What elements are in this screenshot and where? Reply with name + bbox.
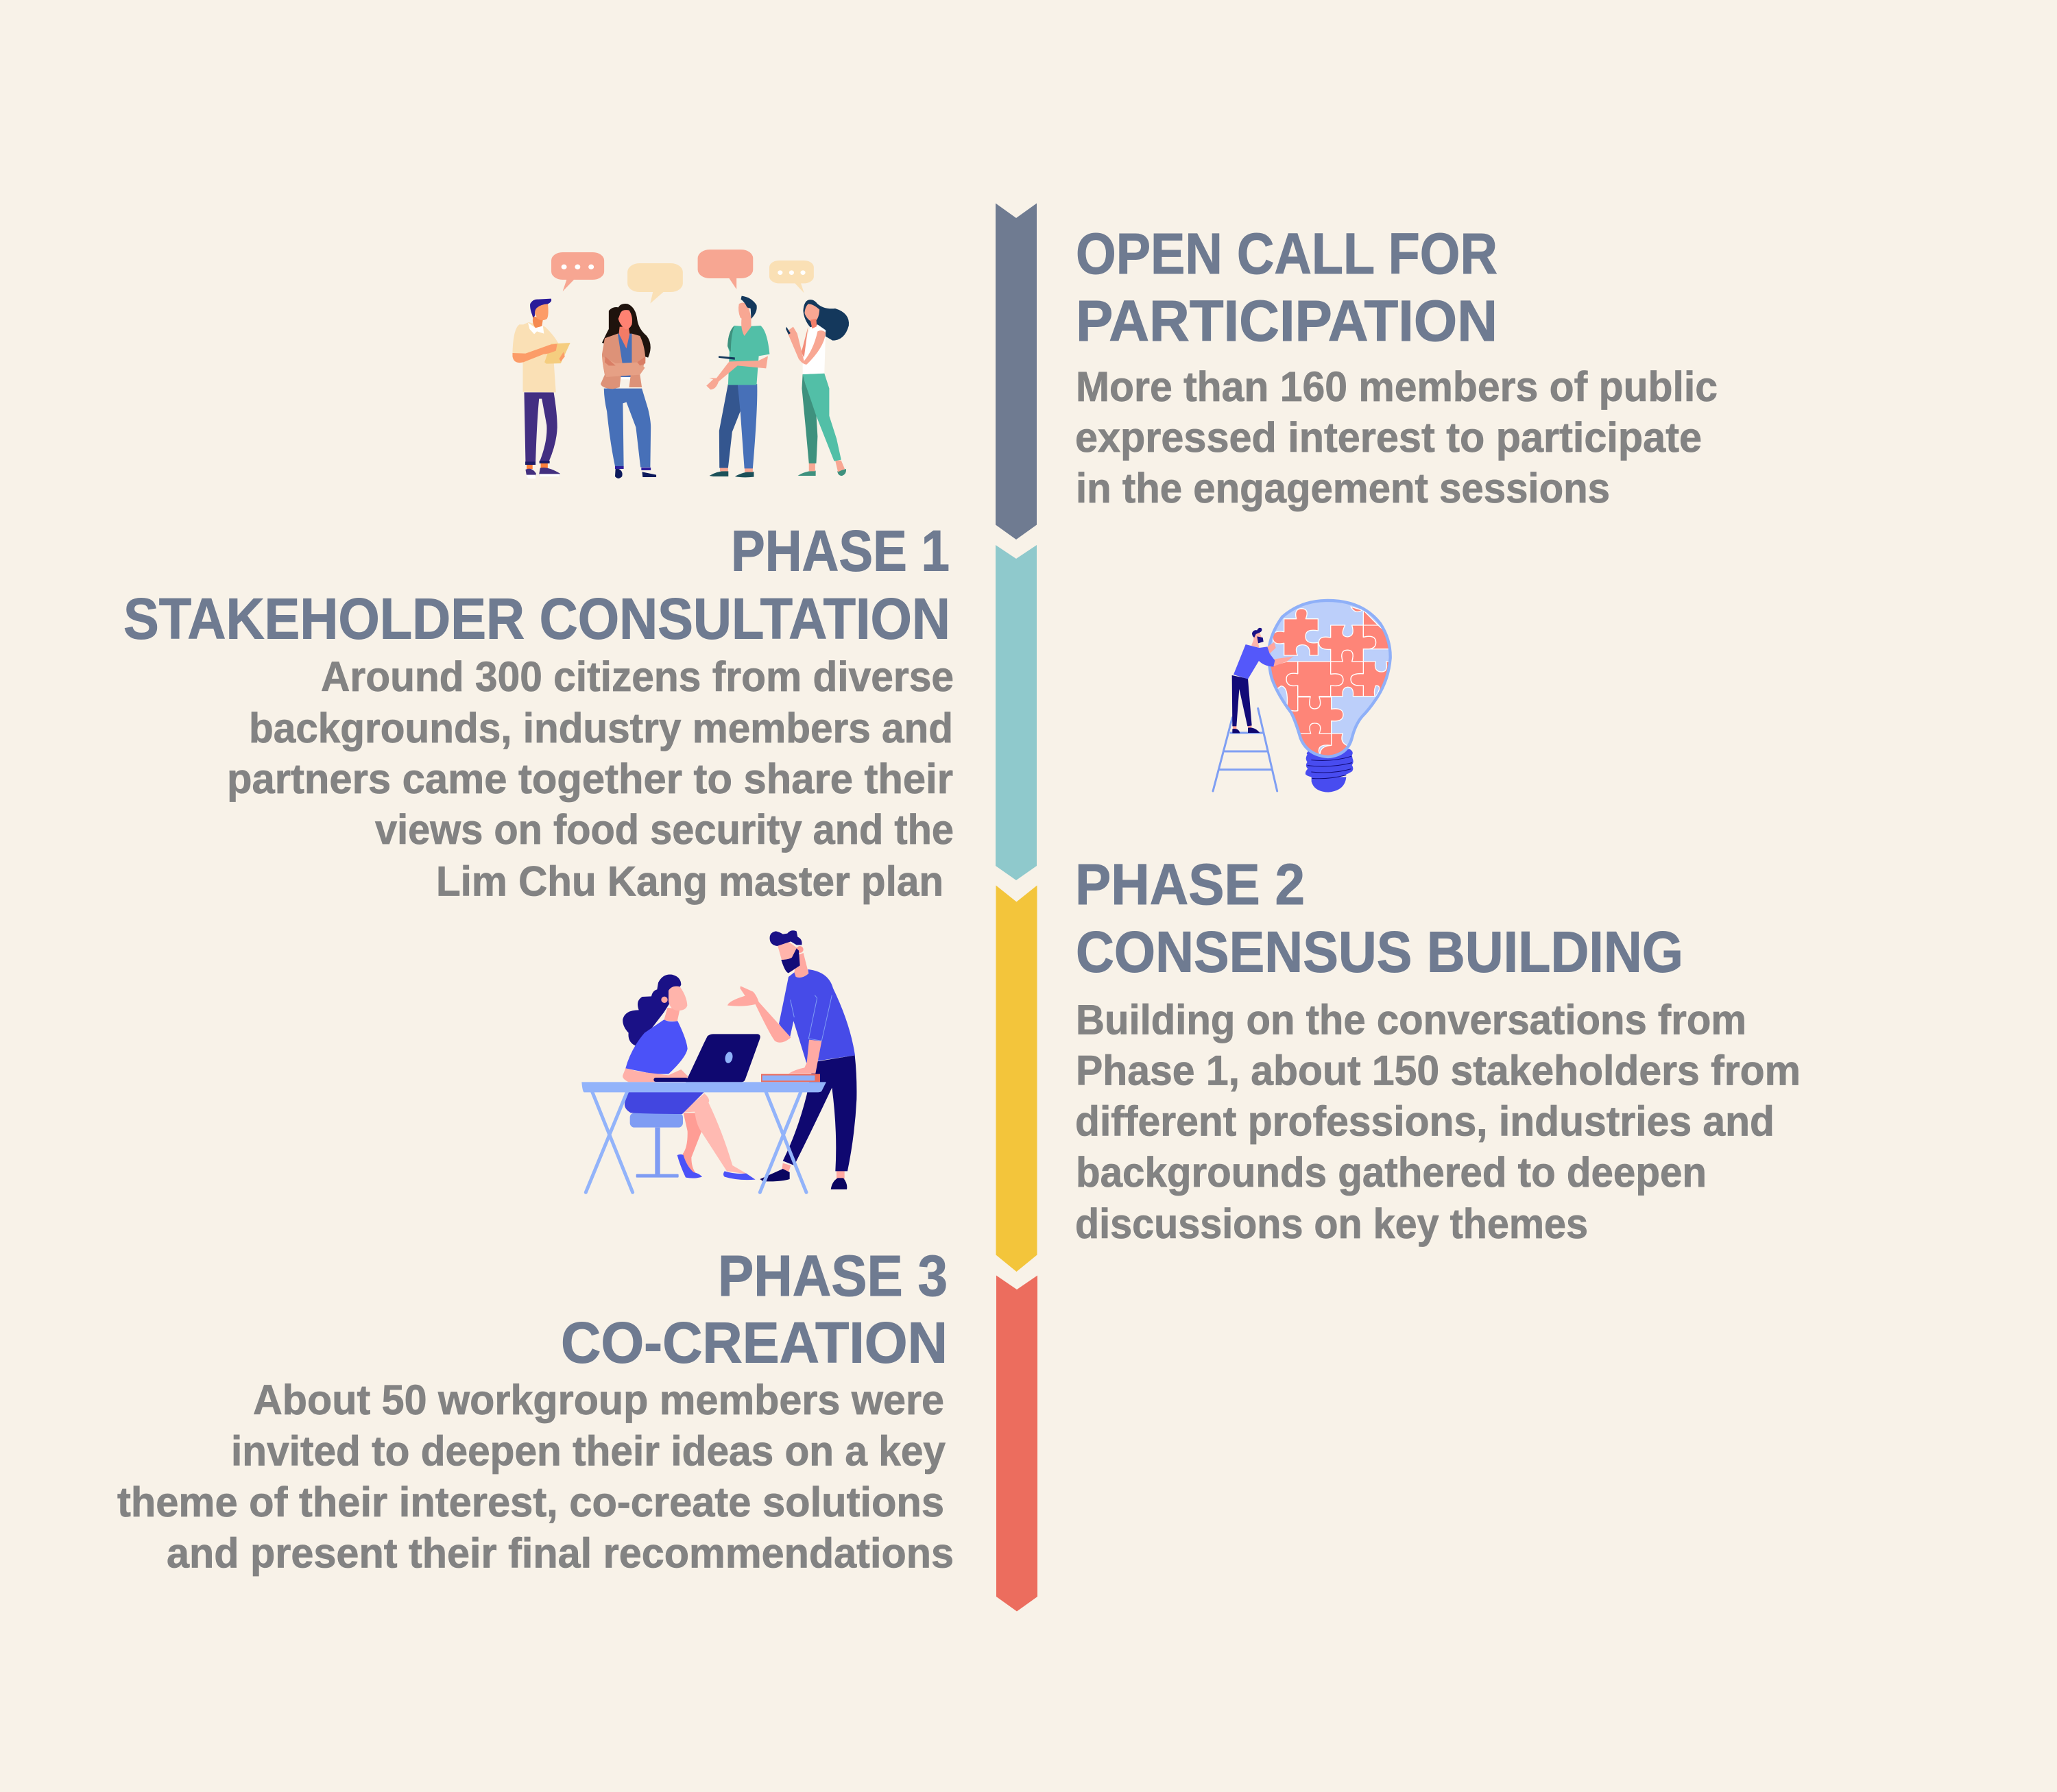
bulb base xyxy=(1306,749,1354,792)
arrow: phase 3 xyxy=(996,1275,1037,1611)
heading: open call xyxy=(1076,221,1497,353)
arrow: phase 1 xyxy=(996,545,1037,880)
panel: phase 2 xyxy=(1075,852,1801,1247)
text block: phase 1: backgrounds, industry members and xyxy=(249,705,953,751)
text block: open call xyxy=(1075,363,1718,511)
text block: phase 1 xyxy=(227,653,954,905)
text block: phase 2 xyxy=(1075,997,1801,1247)
heading: phase 2: CONSENSUS BUILDING xyxy=(1076,920,1683,984)
heading: phase 2 xyxy=(1075,852,1683,984)
person 1 with clipboard xyxy=(512,299,570,479)
text block: phase 3: About 50 workgroup members were xyxy=(253,1377,944,1423)
panel: phase 3 xyxy=(117,1244,954,1577)
timeline arrows xyxy=(996,203,1037,1611)
heading: phase 2: PHASE 2 xyxy=(1075,852,1305,917)
person 3 with phone xyxy=(706,296,769,477)
panel: phase 1 xyxy=(123,518,954,905)
infographic canvas xyxy=(117,203,1799,1611)
illustration: four people talking xyxy=(512,250,849,479)
stool xyxy=(630,1113,683,1178)
text block: phase 2: Building on the conversations from xyxy=(1076,997,1746,1043)
speech bubbles xyxy=(551,250,814,304)
text block: open call: More than 160 members of public xyxy=(1076,363,1718,410)
heading: phase 3 xyxy=(561,1244,948,1375)
text block: phase 1: Lim Chu Kang master plan xyxy=(436,858,943,905)
text block: phase 1: views on food security and the xyxy=(375,806,954,853)
man forearm on books xyxy=(789,1040,821,1074)
text block: phase 2: discussions on key themes xyxy=(1075,1200,1588,1247)
person 2 with crossed arms xyxy=(601,304,656,479)
laptop xyxy=(653,1034,760,1082)
heading: phase 1: PHASE 1 xyxy=(731,518,950,583)
text block: open call: expressed interest to participate xyxy=(1075,414,1702,461)
puzzle bulb xyxy=(1266,601,1394,761)
arrow: open call xyxy=(996,203,1037,540)
text block: phase 2: backgrounds gathered to deepen xyxy=(1076,1149,1707,1196)
man on ladder xyxy=(1232,628,1294,733)
heading: phase 1 xyxy=(123,518,950,651)
books xyxy=(761,1074,820,1082)
ladder xyxy=(1213,708,1277,791)
person 4 with phone xyxy=(786,300,849,476)
desk xyxy=(581,1082,826,1192)
seated woman xyxy=(623,974,756,1180)
text block: phase 3: theme of their interest, co-create solutions xyxy=(117,1479,944,1525)
text block: phase 1: Around 300 citizens from diverse xyxy=(321,653,954,700)
text block: phase 1: partners came together to share their xyxy=(227,755,953,802)
heading: phase 3: CO-CREATION xyxy=(561,1311,948,1375)
text block: phase 3: and present their final recommendations xyxy=(167,1530,954,1577)
text block: phase 3: invited to deepen their ideas on a key xyxy=(231,1427,946,1474)
heading: open call: PARTICIPATION xyxy=(1076,289,1497,353)
heading: phase 3: PHASE 3 xyxy=(718,1244,948,1308)
heading: phase 1: STAKEHOLDER CONSULTATION xyxy=(123,587,950,651)
illustration: two people at a desk with laptop xyxy=(581,930,856,1192)
text block: phase 2: Phase 1, about 150 stakeholders from xyxy=(1076,1048,1801,1094)
text block: phase 3 xyxy=(117,1377,954,1577)
arrow: phase 2 xyxy=(996,886,1037,1272)
text block: phase 2: different professions, industries and xyxy=(1075,1098,1775,1145)
text block: open call: in the engagement sessions xyxy=(1076,465,1610,511)
heading: open call: OPEN CALL FOR xyxy=(1076,221,1497,286)
illustration: man assembling puzzle light bulb xyxy=(1213,601,1394,792)
panel: open call for participation xyxy=(1075,221,1718,511)
standing man xyxy=(727,930,856,1189)
